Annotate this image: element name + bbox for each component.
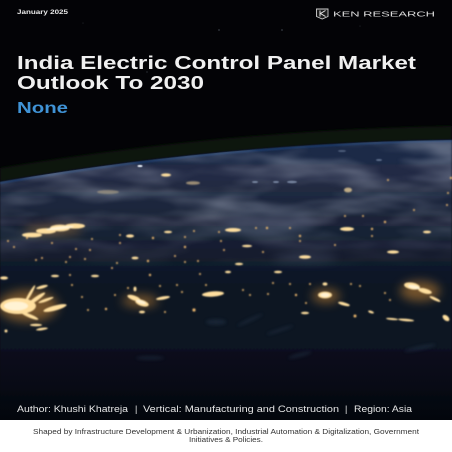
big city with rays: [0, 298, 36, 314]
wordmark: KEN RESEARCH: [333, 10, 435, 19]
footer description: Initiatives & Policies.: [189, 435, 263, 444]
bottom dark band: [0, 392, 452, 420]
lower fade: [0, 345, 452, 420]
hot white cores: [4, 225, 420, 310]
subtitle: None: [17, 100, 68, 117]
limb glow: [0, 141, 452, 183]
city glow: [0, 226, 440, 322]
airglow: [0, 126, 452, 182]
footer description: Shaped by Infrastructure Development & Urbanization, Industrial Automation & Digitalization, Government: [33, 427, 419, 436]
faint ocean wisps: [136, 313, 436, 360]
icon: K shield: [316, 9, 328, 19]
cloud cover: [0, 140, 452, 262]
metadata line: [17, 404, 412, 414]
right cities: [318, 292, 332, 298]
long strip: [22, 233, 42, 237]
metadata line: |: [345, 404, 347, 414]
logo: Ken Research: [316, 9, 435, 19]
small town lights: [7, 177, 452, 318]
metadata line: Vertical: Manufacturing and Construction: [143, 404, 339, 414]
second city cluster: [126, 294, 141, 302]
faint cloud bright patch: [225, 208, 337, 261]
main city lights: [0, 173, 452, 332]
footer description: [33, 427, 419, 444]
title: India Electric Control Panel Market: [17, 52, 416, 73]
metadata line: Author: Khushi Khatreja: [17, 404, 128, 414]
earth disc: [0, 140, 452, 420]
bluish lights and limb flash: [138, 150, 382, 183]
title: Outlook To 2030: [17, 72, 204, 93]
metadata line: Region: Asia: [354, 404, 412, 414]
date: January 2025: [17, 9, 69, 16]
stars: [83, 23, 360, 72]
metadata line: |: [135, 404, 137, 414]
